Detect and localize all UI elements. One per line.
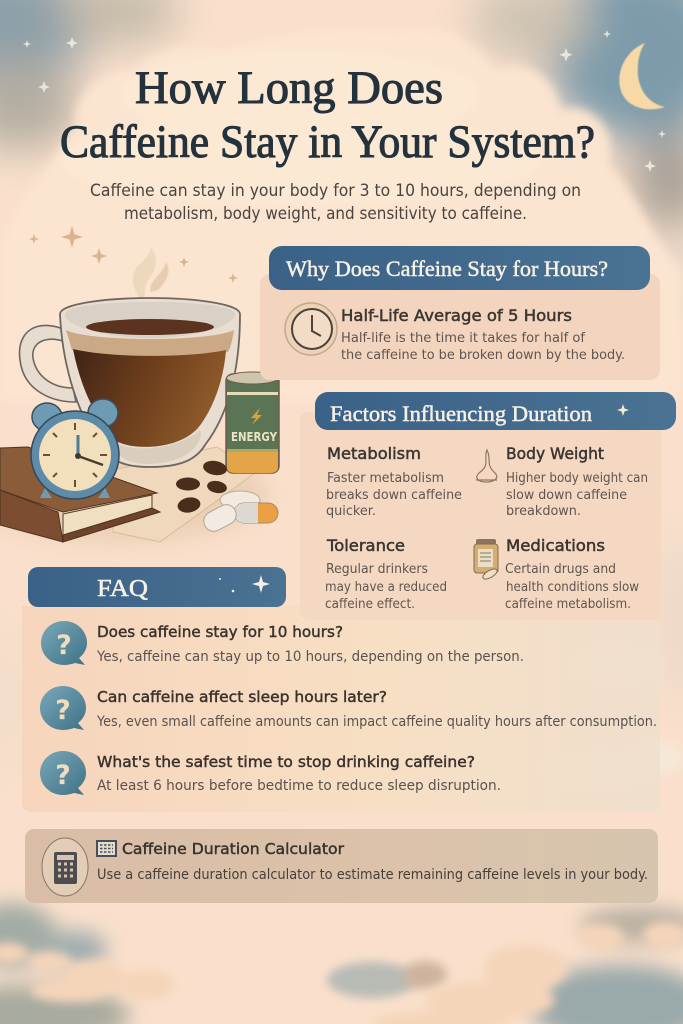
heading: factors: [315, 392, 676, 430]
title: [60, 62, 595, 168]
subtitle: Caffeine can stay in your body for 3 to 10 hours, depending on: [90, 181, 581, 200]
factor: body weight: Higher body weight can: [506, 470, 648, 486]
paper sheet: [113, 447, 255, 542]
question 3: At least 6 hours before bedtime to reduce sleep disruption.: [97, 778, 501, 794]
stars in the sky: [23, 30, 666, 172]
heading: FAQ: FAQ: [97, 576, 148, 602]
factor: medications: Medications: [506, 536, 605, 555]
panel: factors influencing duration: [300, 392, 676, 620]
factor: medications: caffeine metabolism.: [505, 596, 631, 612]
icon: crescent moon: [619, 43, 665, 109]
icon: question bubble: [40, 751, 86, 795]
icon: medication bottle: [474, 539, 499, 581]
table shadow: [0, 447, 270, 543]
heading: why does caffeine stay: Why Does Caffeine Stay for Hours?: [286, 256, 608, 281]
question 2: [40, 686, 657, 730]
can: [226, 372, 279, 473]
icon: question bubble: ?: [56, 630, 72, 661]
cup: [20, 298, 240, 467]
factor: metabolism: Metabolism: [327, 444, 421, 463]
heading: FAQ: [28, 567, 286, 607]
half-life text: Half-Life Average of 5 Hours: [341, 306, 572, 325]
factor: metabolism: quicker.: [326, 503, 376, 519]
decorative sparkles and steam: [29, 226, 238, 305]
pills: [200, 491, 278, 535]
factor: tolerance: may have a reduced: [325, 579, 447, 595]
panel: caffeine duration calculator: Caffeine Duration Calculator: [122, 840, 345, 858]
factor: body weight: [506, 444, 648, 519]
question 3: [40, 751, 501, 795]
title: Caffeine Stay in Your System?: [60, 116, 595, 168]
icon: calculator: [42, 838, 88, 896]
question 3: What's the safest time to stop drinking caffeine?: [97, 753, 475, 771]
subtitle: [90, 181, 581, 223]
heading: why does caffeine stay: [269, 246, 650, 290]
factor: metabolism: breaks down caffeine: [326, 487, 462, 503]
factor: body weight: breakdown.: [506, 503, 581, 519]
factor: medications: [505, 536, 639, 612]
factor: body weight: slow down caffeine: [506, 487, 627, 503]
icon: question bubble: ?: [55, 695, 71, 726]
half-life text: [341, 306, 625, 363]
factor: tolerance: Tolerance: [326, 536, 405, 555]
question 1: [41, 621, 524, 665]
title: How Long Does: [135, 62, 443, 114]
half-life text: the caffeine to be broken down by the body.: [341, 347, 625, 363]
icon: clock: [285, 303, 337, 355]
coffee beans: [176, 459, 228, 514]
factor: tolerance: Regular drinkers: [326, 561, 428, 577]
factor: medications: health conditions slow: [506, 579, 639, 595]
book: [0, 447, 160, 542]
subtitle: metabolism, body weight, and sensitivity to caffeine.: [124, 204, 527, 223]
icon: question bubble: ?: [55, 760, 71, 791]
panel: why caffeine stays: [260, 246, 660, 380]
question 1: Yes, caffeine can stay up to 10 hours, depending on the person.: [96, 649, 524, 665]
icon: question bubble: [40, 686, 86, 730]
illustration: coffee cup, clock, can, book: [0, 226, 279, 543]
icon: small calculator grid: [97, 841, 116, 856]
panel: FAQ: [22, 567, 660, 812]
top cloud shape: [0, 29, 683, 400]
icon: question bubble: [41, 621, 87, 665]
factor: body weight: Body Weight: [506, 444, 604, 463]
can: ENERGY: [231, 430, 277, 444]
question 2: Can caffeine affect sleep hours later?: [97, 688, 387, 706]
factor: medications: Certain drugs and: [505, 561, 616, 577]
factor: metabolism: Faster metabolism: [327, 470, 444, 486]
icon: body weight: [476, 450, 497, 482]
half-life text: Half-life is the time it takes for half of: [341, 330, 586, 346]
panel: caffeine duration calculator: [25, 829, 658, 903]
factor: metabolism: [326, 444, 462, 519]
heading: factors: Factors Influencing Duration: [330, 401, 592, 426]
question 1: Does caffeine stay for 10 hours?: [97, 623, 343, 641]
bottom cloud bank: [0, 903, 683, 1024]
alarm clock: [31, 399, 119, 499]
factor: tolerance: [325, 536, 447, 612]
factor: tolerance: caffeine effect.: [325, 596, 415, 612]
